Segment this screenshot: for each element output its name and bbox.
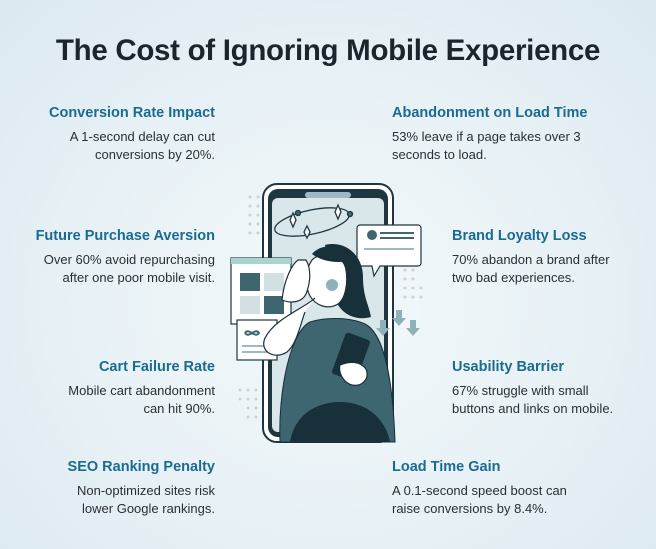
text block: abandonment on load time xyxy=(392,105,587,162)
illustration: woman xyxy=(264,244,395,442)
text block: load time gain: Load Time Gain xyxy=(392,459,501,475)
text block: future purchase aversion xyxy=(36,228,215,285)
text block: brand loyalty loss: Brand Loyalty Loss xyxy=(452,228,587,244)
text block: conversion rate impact: A 1-second delay can cut xyxy=(70,129,215,144)
text block: conversion rate impact xyxy=(49,105,215,162)
illustration: frustrated woman in phone xyxy=(230,183,422,443)
text block: conversion rate impact: Conversion Rate Impact xyxy=(49,105,215,121)
text block: cart failure rate: can hit 90%. xyxy=(143,401,215,416)
icon: down arrows xyxy=(376,310,420,336)
text block: seo ranking penalty: SEO Ranking Penalty xyxy=(68,459,215,475)
text block: usability barrier xyxy=(452,359,613,416)
text block: cart failure rate: Mobile cart abandonment xyxy=(68,383,215,398)
text block: brand loyalty loss: 70% abandon a brand after xyxy=(452,252,610,267)
icon: dot grids xyxy=(238,196,422,418)
text block: usability barrier: Usability Barrier xyxy=(452,359,564,375)
text block: cart failure rate: Cart Failure Rate xyxy=(99,359,215,375)
text block: brand loyalty loss xyxy=(452,228,610,285)
text block: seo ranking penalty: lower Google rankings. xyxy=(82,501,215,516)
text block: load time gain: A 0.1-second speed boost can xyxy=(392,483,567,498)
text block: abandonment on load time: Abandonment on Load Time xyxy=(392,105,587,121)
text block: seo ranking penalty xyxy=(68,459,215,516)
icon: chat bubble xyxy=(357,225,421,276)
text block: future purchase aversion: after one poor mobile visit. xyxy=(63,270,215,285)
text block: abandonment on load time: seconds to load. xyxy=(392,147,487,162)
icon: dizzy swirl xyxy=(272,202,352,242)
text block: future purchase aversion: Future Purchase Aversion xyxy=(36,228,215,244)
text block: usability barrier: buttons and links on mobile. xyxy=(452,401,613,416)
text block: load time gain xyxy=(392,459,567,516)
text block: brand loyalty loss: two bad experiences. xyxy=(452,270,575,285)
icon: web window grid xyxy=(231,258,291,360)
icon: phone frame xyxy=(263,184,393,442)
text block: seo ranking penalty: Non-optimized sites risk xyxy=(77,483,215,498)
text block: cart failure rate xyxy=(68,359,215,416)
text block: conversion rate impact: conversions by 20%. xyxy=(95,147,215,162)
text block: load time gain: raise conversions by 8.4%. xyxy=(392,501,547,516)
text block: abandonment on load time: 53% leave if a page takes over 3 xyxy=(392,129,581,144)
title: The Cost of Ignoring Mobile Experience xyxy=(56,34,600,67)
text block: usability barrier: 67% struggle with small xyxy=(452,383,589,398)
text block: future purchase aversion: Over 60% avoid repurchasing xyxy=(44,252,215,267)
